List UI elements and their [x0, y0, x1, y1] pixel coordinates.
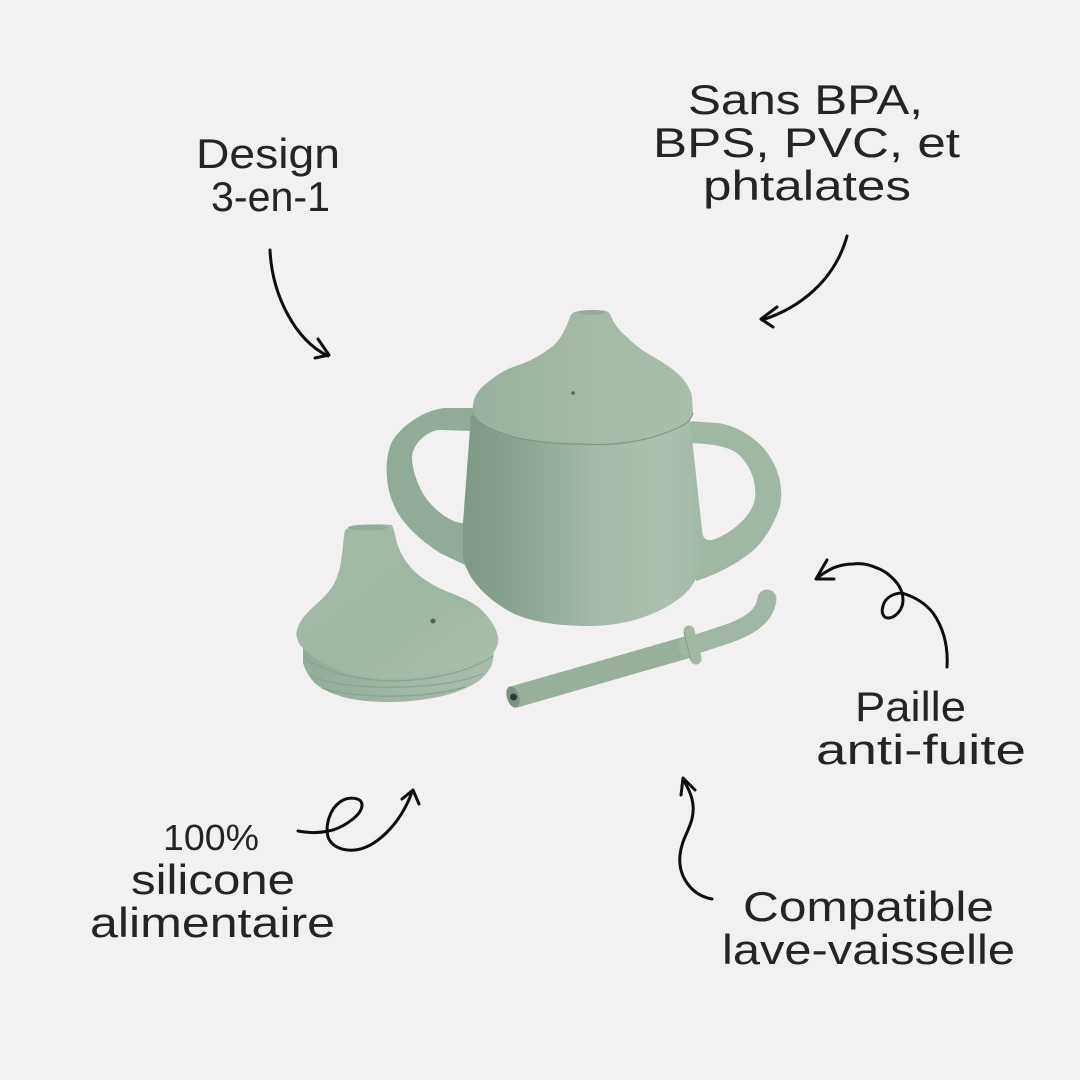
label: 100% silicone alimentaire: 100% [163, 817, 259, 858]
arrow: silicone [298, 790, 419, 850]
arrow: compatible [680, 778, 712, 899]
label: Sans BPA: BPS, PVC, et [653, 119, 960, 166]
label: Sans BPA: Sans BPA, [688, 76, 923, 123]
label: Paille anti-fuite: anti-fuite [816, 726, 1026, 773]
label: Paille anti-fuite: Paille [855, 683, 966, 730]
product: sippy cup [387, 310, 781, 626]
arrow: design [270, 250, 329, 358]
label: Design 3-en-1 [196, 130, 340, 220]
lid seam [473, 413, 693, 445]
label: Sans BPA: phtalates [703, 162, 911, 209]
product: spare lid [296, 524, 498, 702]
label: Paille anti-fuite [816, 683, 1026, 773]
threaded base [303, 648, 494, 702]
label: 100% silicone alimentaire [90, 817, 335, 946]
arrow: paille [816, 560, 947, 667]
cup right handle [688, 421, 781, 581]
label: Design 3-en-1: Design [196, 130, 340, 177]
cup left handle [387, 408, 474, 565]
straw ring [689, 631, 696, 659]
spare lid opening [348, 524, 388, 530]
label: 100% silicone alimentaire: alimentaire [90, 899, 335, 946]
spout opening [577, 310, 605, 315]
spare lid air hole [430, 618, 436, 624]
cup lid [473, 310, 693, 445]
straw tube [514, 647, 688, 697]
label: Compatible lave-vaisselle [722, 883, 1015, 973]
label: Sans BPA [653, 76, 960, 209]
thread lines [304, 656, 493, 696]
label: Compatible lave-vaisselle: lave-vaisselle [722, 926, 1015, 973]
label: Design 3-en-1: 3-en-1 [211, 173, 330, 220]
dome [296, 524, 498, 678]
label: 100% silicone alimentaire: silicone [131, 856, 295, 903]
cup body [463, 415, 703, 626]
lid air hole [571, 391, 575, 395]
label: Compatible lave-vaisselle: Compatible [743, 883, 994, 930]
straw end [504, 685, 522, 709]
arrow: sans BPA [761, 236, 847, 327]
product: straw [504, 599, 767, 709]
